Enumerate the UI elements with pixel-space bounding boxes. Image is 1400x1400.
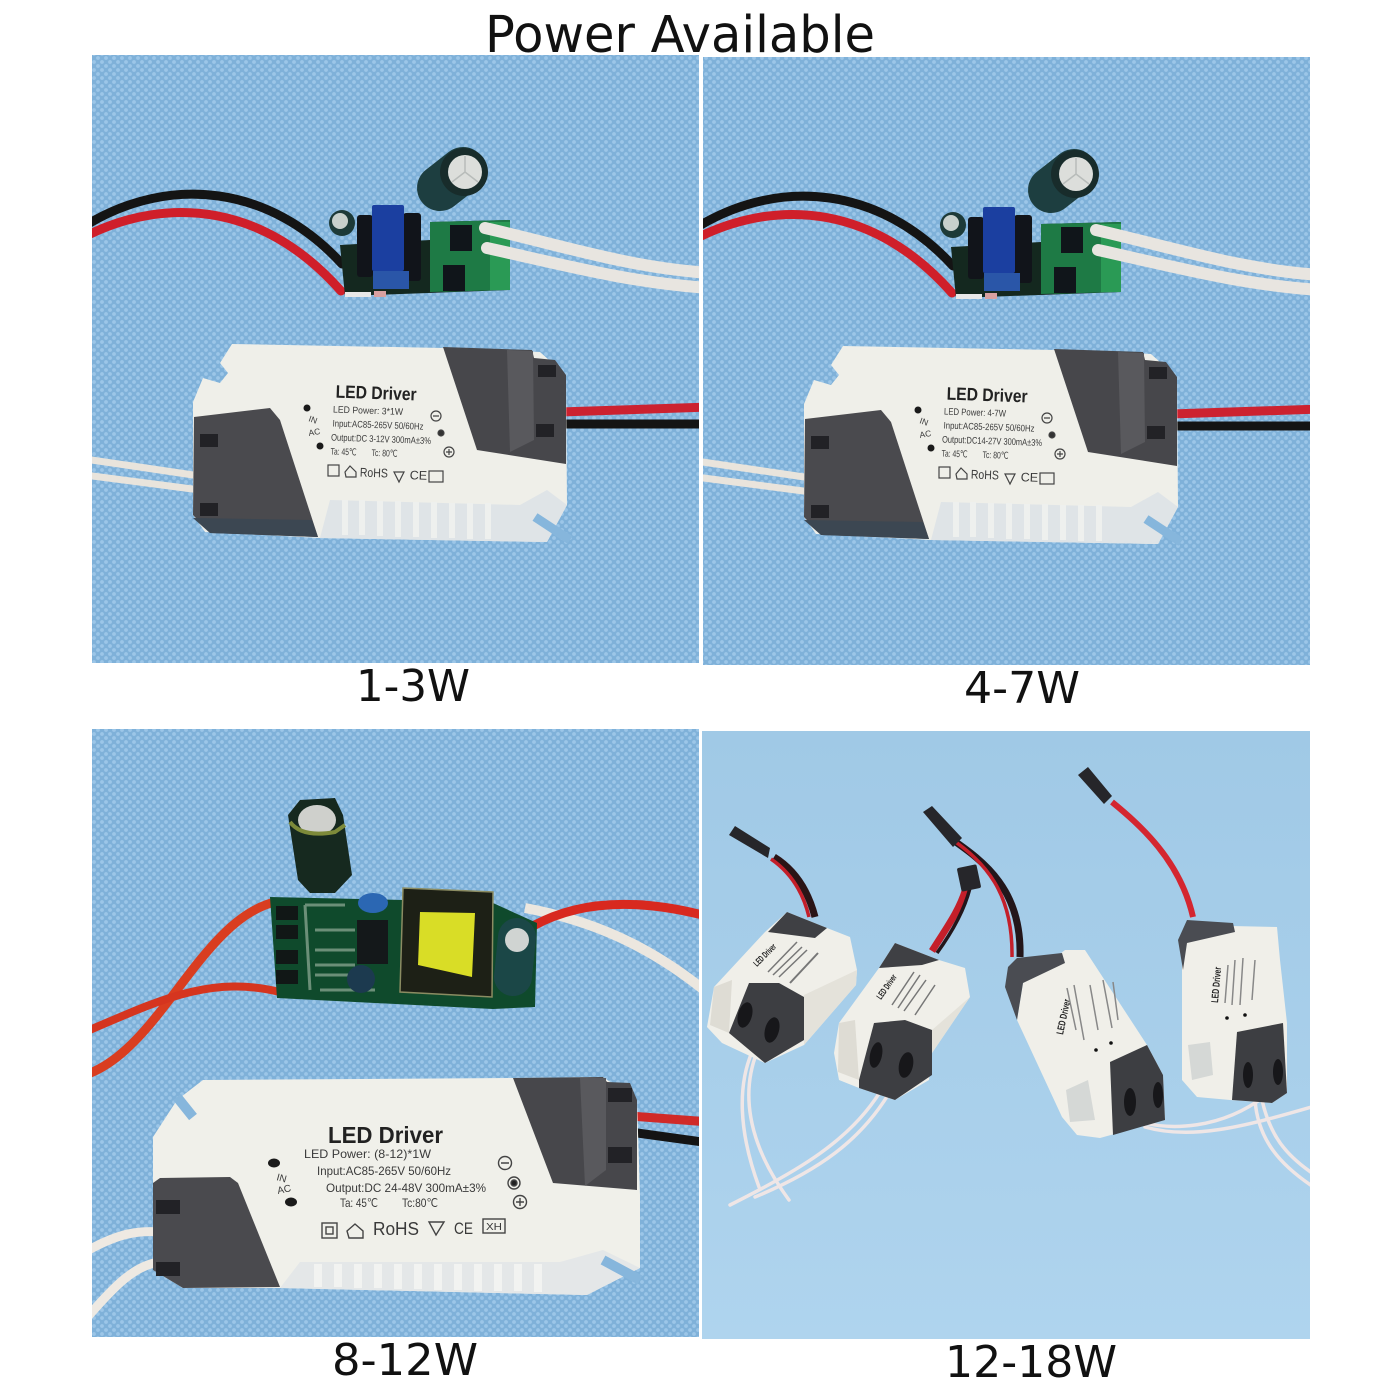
driver label text: LED Driver xyxy=(335,382,417,404)
driver label text: LED Driver xyxy=(328,1122,443,1148)
output wires xyxy=(525,904,710,995)
driver label text: LED Driver xyxy=(946,384,1028,406)
driver label text: Ta: 45℃ xyxy=(941,448,968,460)
connectors xyxy=(729,767,1112,892)
driver label text: Ta: 45℃ xyxy=(340,1196,378,1210)
driver label text: Output:DC14-27V 300mA±3% xyxy=(942,434,1043,449)
panel: 1-3W driver photo xyxy=(85,55,710,663)
title: Power Available xyxy=(485,6,875,65)
driver case xyxy=(193,344,570,542)
driver label text: LED Power: 4-7W xyxy=(944,407,1006,420)
IN AC marks: IN xyxy=(307,413,319,426)
circuit board xyxy=(329,205,510,297)
driver label text: Tc: 80℃ xyxy=(982,450,1009,462)
driver 4: LED Driver xyxy=(1210,966,1224,1003)
driver label text: Input:AC85-265V 50/60Hz xyxy=(332,419,424,433)
capacitor xyxy=(1051,150,1099,198)
driver 1: LED Driver xyxy=(751,941,778,968)
IN AC marks xyxy=(914,406,934,452)
driver label text: Tc:80℃ xyxy=(402,1196,438,1210)
driver label text: LED Power: 3*1W xyxy=(333,405,403,418)
panel: 12-18W four drivers photo xyxy=(702,731,1315,1339)
driver label text: Ta: 45℃ xyxy=(330,446,357,458)
circuit board xyxy=(940,207,1121,299)
driver label text: RoHS xyxy=(373,1219,419,1239)
circuit board xyxy=(270,888,537,1009)
driver label text xyxy=(275,1122,486,1239)
IN AC marks: AC xyxy=(919,428,932,440)
driver label text: RoHS xyxy=(360,465,388,480)
driver case: XH xyxy=(486,1222,502,1233)
wires to driver xyxy=(85,407,710,490)
label: 12-18W: 12-18W xyxy=(945,1337,1117,1388)
label: 1-3W: 1-3W xyxy=(356,661,470,712)
capacitor xyxy=(440,148,488,196)
driver label text: CE xyxy=(454,1219,473,1238)
wires to driver xyxy=(696,409,1321,492)
input wires: black and red xyxy=(699,196,953,293)
panel: 4-7W driver photo xyxy=(696,57,1321,665)
white output wires xyxy=(730,1052,1315,1205)
capacitor xyxy=(288,798,352,893)
driver 3: LED Driver xyxy=(1055,998,1073,1036)
driver label text: RoHS xyxy=(971,467,999,482)
IN AC dots xyxy=(268,1158,297,1206)
driver label text: CE xyxy=(1021,470,1038,485)
driver 3 xyxy=(1005,950,1165,1138)
driver label text: AC xyxy=(276,1183,292,1197)
input wires: black and red xyxy=(88,194,342,291)
driver label text: LED Power: (8-12)*1W xyxy=(304,1147,432,1161)
driver 4 xyxy=(1178,920,1287,1103)
label: 8-12W: 8-12W xyxy=(332,1335,478,1386)
driver label text xyxy=(941,383,1044,485)
driver case xyxy=(804,346,1181,544)
driver 1 xyxy=(707,912,857,1063)
driver label text: Tc: 80℃ xyxy=(371,448,398,460)
driver case xyxy=(153,1077,640,1295)
panel: 8-12W driver photo xyxy=(85,729,710,1337)
output wires: white xyxy=(485,228,710,288)
driver label text: Input:AC85-265V 50/60Hz xyxy=(317,1164,451,1178)
IN AC marks: IN xyxy=(918,415,930,428)
driver 2 xyxy=(834,943,970,1100)
polarity and certification icons xyxy=(939,413,1065,484)
wires to driver xyxy=(85,1116,710,1320)
driver label text: Output:DC 24-48V 300mA±3% xyxy=(326,1181,486,1195)
driver label text: IN xyxy=(275,1172,288,1185)
input wires: red and orange xyxy=(85,902,280,1075)
output wires: white xyxy=(1096,230,1321,290)
polarity and certification icons xyxy=(328,411,454,482)
driver label text: Input:AC85-265V 50/60Hz xyxy=(943,421,1035,435)
driver label text: CE xyxy=(410,468,427,483)
label: 4-7W: 4-7W xyxy=(964,663,1080,714)
driver 2: LED Driver xyxy=(874,972,899,1001)
polarity and certification icons xyxy=(322,1156,526,1238)
power wires: red and black xyxy=(771,802,1193,957)
driver label text xyxy=(330,381,433,483)
IN AC marks: AC xyxy=(308,426,321,438)
IN AC marks xyxy=(304,404,324,450)
driver label text: Output:DC 3-12V 300mA±3% xyxy=(331,432,432,447)
